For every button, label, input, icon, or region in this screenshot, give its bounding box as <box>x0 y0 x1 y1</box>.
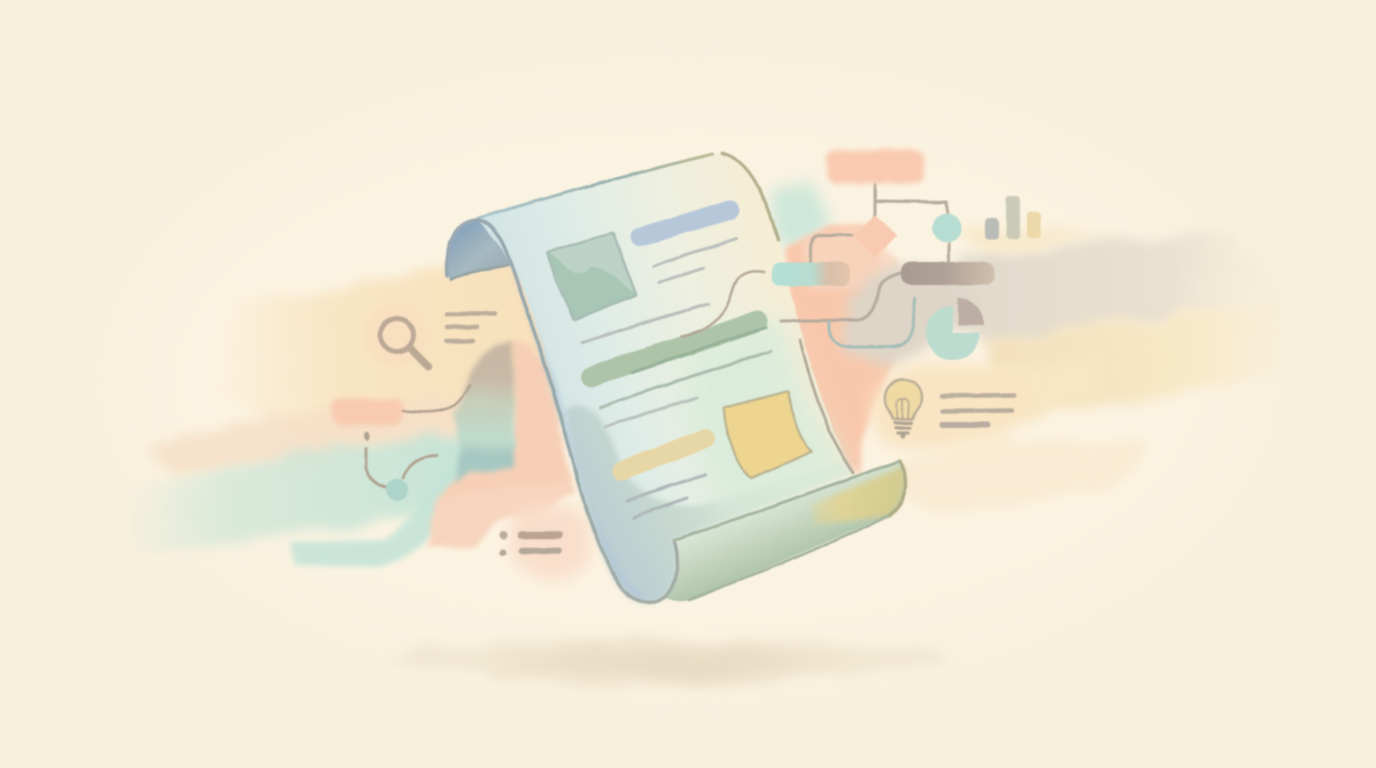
bullet list backdrop <box>510 503 590 580</box>
watercolor washes behind the scroll <box>120 182 1290 567</box>
icon glow: lightbulb backdrop <box>871 364 1030 448</box>
teal loop connector <box>829 298 914 347</box>
yellow roll tint <box>812 466 905 525</box>
peach top box <box>827 149 923 184</box>
mint page tint <box>680 315 850 520</box>
icon: lightbulb <box>885 380 922 439</box>
bar chart <box>985 196 1041 239</box>
right cluster: flowchart <box>772 149 1041 439</box>
lower page tint <box>565 406 853 602</box>
text lines beside lightbulb <box>942 395 1014 425</box>
text lines lower <box>627 475 706 518</box>
scroll page body <box>478 154 853 602</box>
flowchart connectors <box>781 184 949 321</box>
green image block <box>547 233 636 320</box>
text lines upper <box>582 239 737 343</box>
text lines middle <box>600 328 771 427</box>
green text bar <box>591 321 757 377</box>
icon glow: magnifier backdrop <box>364 303 428 367</box>
teal label pill <box>772 262 850 286</box>
peach label pill <box>331 398 403 425</box>
yellow image block <box>723 391 812 478</box>
blue heading bar <box>640 210 730 237</box>
connector into page <box>682 271 764 336</box>
blue left shading <box>497 240 650 600</box>
icon: magnifying glass <box>380 318 429 367</box>
pie chart <box>926 298 984 360</box>
shadow under the scroll <box>383 640 953 686</box>
left cluster: search, lists, connectors <box>331 303 590 580</box>
text lines beside magnifier <box>447 314 495 341</box>
teal circle <box>932 213 962 243</box>
teal node <box>386 479 408 501</box>
grey label pill <box>901 262 995 285</box>
scroll top curl back <box>447 220 510 280</box>
connector from pill to dome <box>403 386 470 412</box>
scroll outlines <box>447 153 906 602</box>
dome shape <box>452 341 513 482</box>
bullet list <box>499 531 559 556</box>
yellow text bar <box>622 438 706 471</box>
peach diamond <box>853 215 897 257</box>
scroll bottom roll <box>665 461 906 601</box>
scroll document <box>447 153 906 602</box>
dot and curved connector <box>364 432 437 488</box>
